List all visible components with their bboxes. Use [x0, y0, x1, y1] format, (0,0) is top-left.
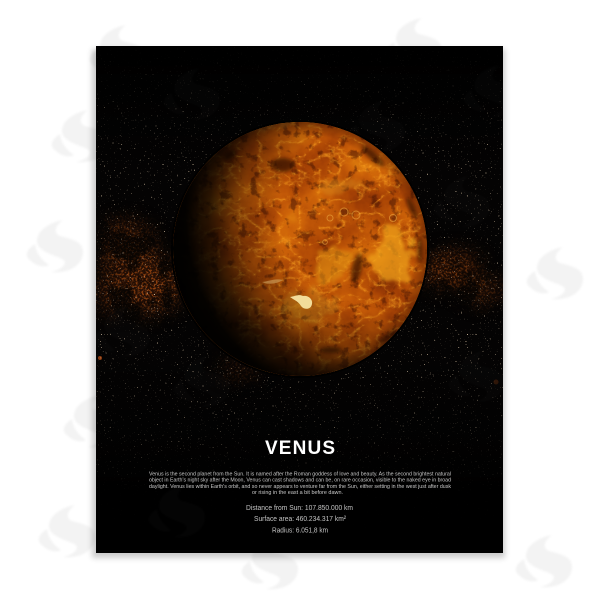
- impact craters: [323, 208, 396, 244]
- space background: [96, 49, 503, 490]
- description text block: or rising in the east a bit before dawn.: [252, 490, 343, 496]
- shadow over the planet: [173, 122, 427, 376]
- nebula band: [96, 210, 503, 386]
- poster drop shadow: [92, 49, 505, 558]
- planet surface texture: [170, 120, 430, 380]
- planet statistics: Distance from Sun: 107.850.000 km: [246, 503, 353, 512]
- bright lava flow feature: [262, 279, 312, 309]
- planet Venus: [170, 119, 430, 380]
- dark watermarks on poster: [94, 65, 520, 537]
- faint stains in the sky: [98, 356, 498, 384]
- planet statistics: [246, 503, 353, 534]
- description text block: daylight. Venus lies within Earth's orbit, and so never appears to venture far from the Sun, either setting in the west just after dusk: [149, 484, 451, 490]
- title: VENUS: [265, 438, 335, 459]
- dark surface regions: [222, 143, 422, 353]
- poster: Venus: [94, 46, 520, 553]
- description text block: [149, 472, 451, 496]
- bright surface regions: [260, 122, 418, 323]
- planet statistics: Radius: 6.051,8 km: [272, 526, 328, 534]
- description text block: object in Earth's night sky after the Moon, Venus can cast shadows and can be, on rare occasion, visible to the naked eye in broad: [149, 478, 451, 484]
- star field: [96, 54, 503, 488]
- planet statistics: Surface area: 460.234.317 km²: [254, 514, 346, 523]
- description text block: Venus is the second planet from the Sun. It is named after the Roman goddess of love and beauty. As the second brightest natural: [149, 472, 451, 478]
